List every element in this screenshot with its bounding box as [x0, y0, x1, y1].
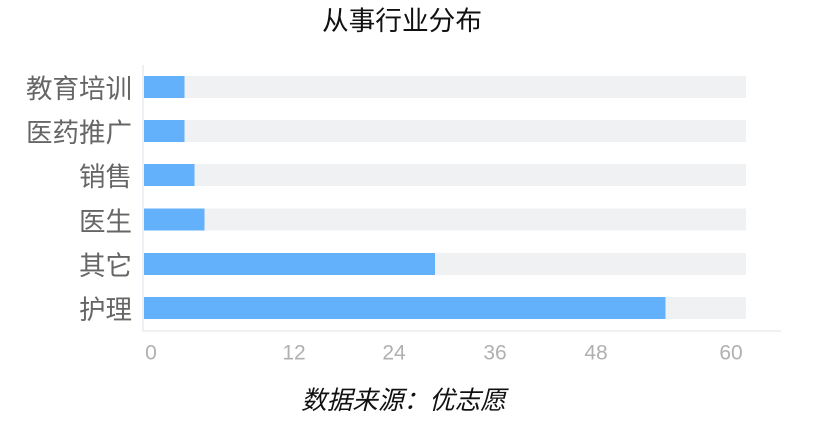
row: 销售 — [79, 162, 746, 192]
source note: 数据来源：优志愿 — [301, 387, 509, 415]
title: 从事行业分布 — [322, 6, 482, 36]
row: 医生: 医生 — [79, 207, 132, 237]
row: 销售: 销售 — [79, 162, 132, 192]
bar chart — [26, 65, 781, 364]
x axis labels: 48 — [584, 342, 608, 364]
row: 医生 — [79, 207, 746, 237]
x axis labels — [145, 342, 743, 364]
x axis labels: 60 — [719, 342, 743, 364]
row: 其它: 其它 — [79, 251, 132, 281]
row: 护理: 护理 — [79, 295, 132, 325]
x axis labels: 36 — [483, 342, 507, 364]
row: 教育培训 — [26, 74, 746, 104]
row: 医药推广: 医药推广 — [26, 118, 132, 148]
x axis labels: 0 — [145, 342, 157, 364]
x axis labels: 24 — [382, 342, 406, 364]
row: 教育培训: 教育培训 — [26, 74, 132, 104]
row: 护理 — [79, 295, 746, 325]
row: 其它 — [79, 251, 746, 281]
row: 医药推广 — [26, 118, 746, 148]
x axis labels: 12 — [282, 342, 306, 364]
